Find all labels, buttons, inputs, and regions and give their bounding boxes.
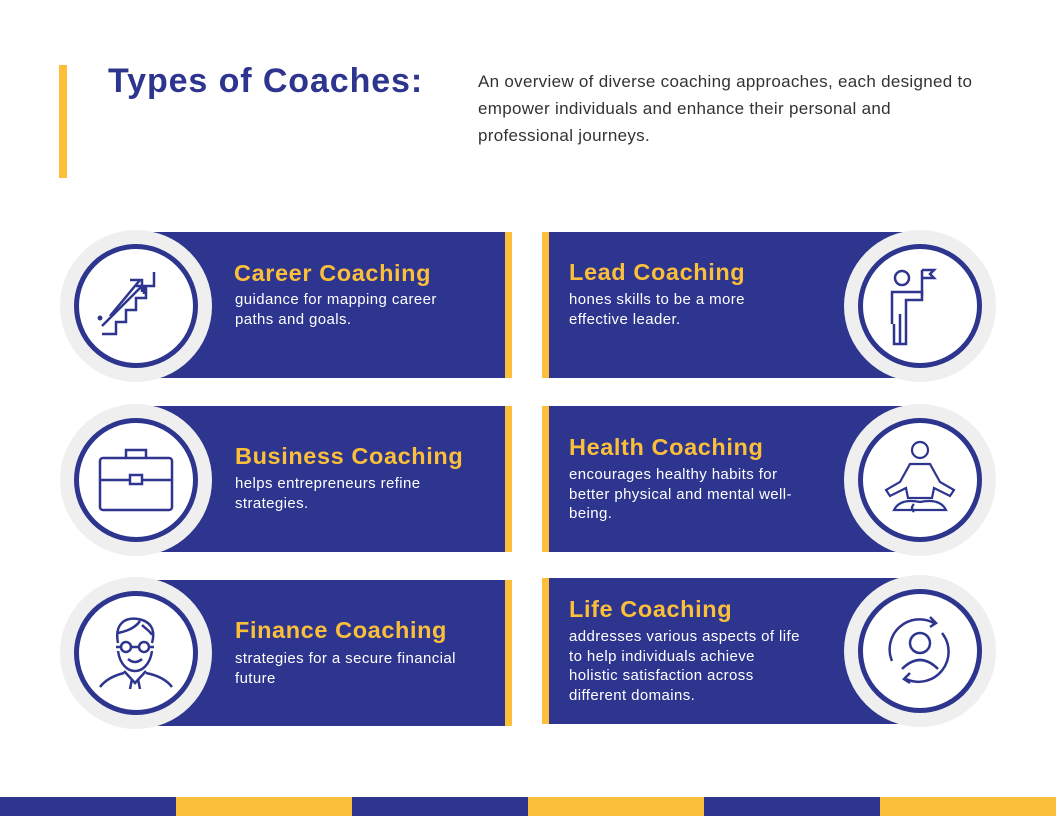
icon: briefcase	[60, 404, 212, 556]
text: life: Life Coaching	[569, 596, 732, 622]
icon: meditation	[844, 404, 996, 556]
card: lead	[542, 230, 996, 382]
text: lead: Lead Coaching	[569, 259, 745, 285]
icon: leader flag	[844, 230, 996, 382]
text: career: Career Coaching	[234, 260, 431, 286]
text: business: Business Coaching	[235, 443, 463, 469]
card: life	[542, 575, 996, 727]
title: Types of Coaches:	[108, 62, 423, 100]
icon: stairs arrow	[60, 230, 212, 382]
card: finance	[60, 577, 512, 729]
description: An overview of diverse coaching approaches, each designed to empower individuals and enhance their personal and professional journeys.	[478, 72, 972, 145]
footer color strip	[0, 797, 1056, 816]
card: career: guidance for mapping career paths and goals.	[235, 291, 437, 328]
card: health: encourages healthy habits for better physical and mental well-being.	[569, 466, 792, 522]
icon: finance person	[60, 577, 212, 729]
card: career	[60, 230, 512, 382]
card: finance: strategies for a secure financial future	[235, 650, 456, 686]
card: lead: hones skills to be a more effective leader.	[569, 291, 745, 328]
text: health: Health Coaching	[569, 434, 763, 460]
icon: person cycle	[844, 575, 996, 727]
card: business: helps entrepreneurs refine strategies.	[235, 475, 421, 512]
card: health	[542, 404, 996, 556]
card: life: addresses various aspects of life to help individuals achieve holistic satisfaction across different domains.	[569, 628, 800, 704]
title accent bar	[59, 65, 67, 178]
text: finance: Finance Coaching	[235, 617, 447, 643]
card: business	[60, 404, 512, 556]
